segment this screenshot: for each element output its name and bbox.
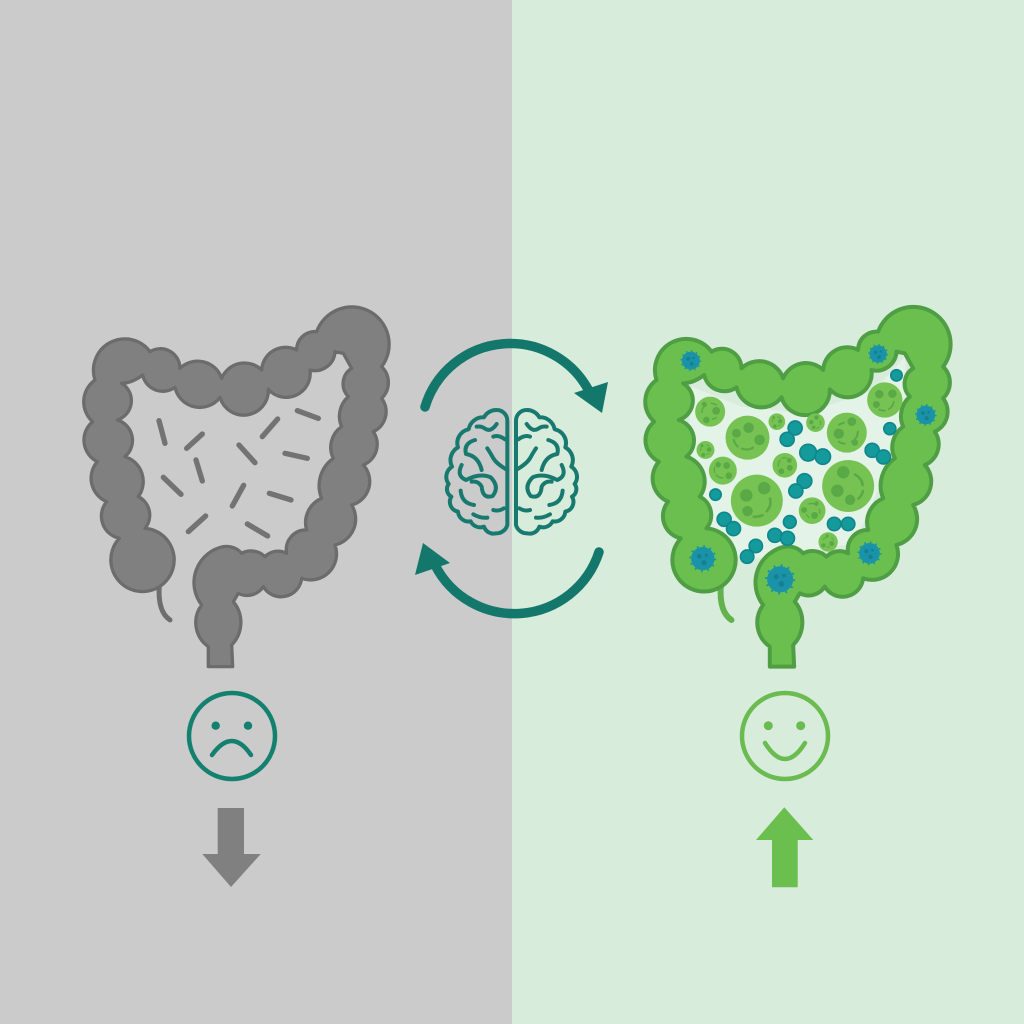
bottom arc arrow [415,543,599,614]
healthy colon [645,307,951,667]
unhealthy colon [84,307,389,667]
icon: happy face [742,693,828,779]
cycle arrows [415,344,608,614]
appendix [159,585,170,620]
sparse rod bacteria [159,411,318,536]
arrow: down [202,808,261,887]
colon body [645,307,951,667]
green microbes [695,375,910,555]
interior light area [688,357,908,560]
left hemisphere [446,410,507,534]
right hemisphere [516,410,577,534]
arrow: up [756,807,813,887]
top arc arrow [425,344,608,413]
panel: right green background [512,0,1024,1024]
colon body [84,307,389,667]
icon: sad face [189,693,275,779]
teal diplococci [710,370,902,563]
teal viruses on colon wall [682,345,935,593]
appendix [721,585,731,620]
panel: left grey background [0,0,512,1024]
icon: brain [446,410,577,534]
